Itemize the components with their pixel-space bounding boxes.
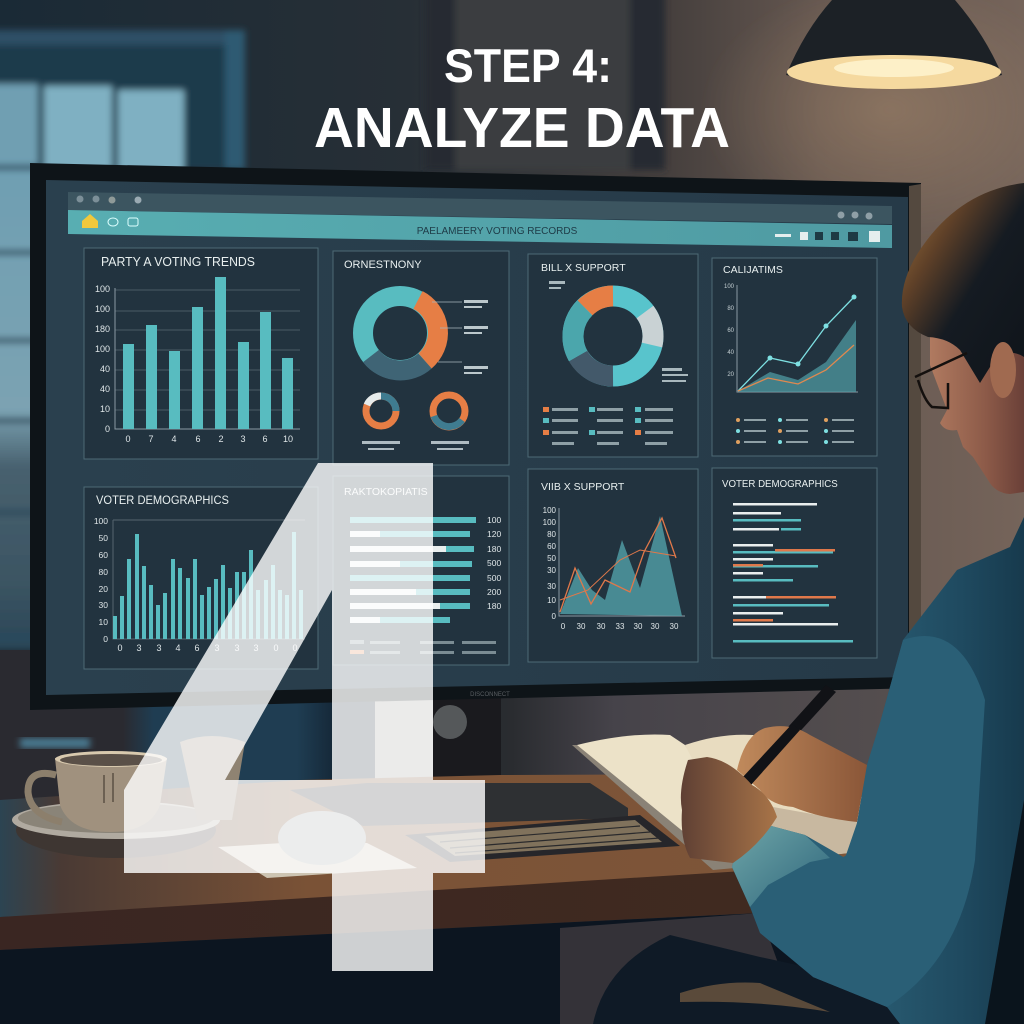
panel: party A voting trends: 0 [105,424,110,434]
panel: horizontal bars: 500 [487,573,501,583]
panel: party A voting trends: 3 [240,434,246,444]
panel: party A voting trends: 40 [100,384,110,394]
glasses [915,353,967,408]
panel: party A voting trends: 10 [283,434,293,444]
panel: party A voting trends: 6 [262,434,268,444]
panel: bill X support donut [528,254,698,457]
monitor base [290,783,628,826]
panel: voter demographics histogram: 3 [253,643,259,653]
title: STEP 4: [444,39,612,92]
panel: donut overview [333,251,509,465]
panel: bill X support line chart: 33 [616,622,625,631]
panel: bill X support line chart: 10 [547,596,557,605]
panel: voter demographics histogram: 80 [99,567,108,577]
panel: voter demographics histogram: 30 [99,600,108,610]
panel: voter demographics histogram: 4 [175,643,181,653]
panel: bill X support line chart: 50 [547,554,557,563]
pen over hand [742,724,800,786]
title [314,39,730,160]
computer mouse [278,811,366,865]
panel: voter demographics histogram: 3 [136,643,142,653]
panel: party A voting trends: 100 [95,344,110,354]
panel: party A voting trends: 4 [171,434,177,444]
panel: horizontal bars: 100 [487,515,501,525]
panel: party A voting trends: 40 [100,364,110,374]
monitor stand [375,695,501,795]
desk [0,773,1024,1024]
panel: calculations line chart: CALIJATIMS [723,264,783,276]
wall below monitor [0,650,1024,820]
blurred background strip [20,738,90,748]
panel: bill X support line chart [528,469,698,662]
panel: bill X support line chart: 30 [547,566,557,575]
cuff [732,823,830,907]
panel: voter demographics histogram: 0 [292,643,298,653]
panel: calculations line chart: 20 [727,372,735,378]
hair [902,183,1024,383]
panel: voter demographics histogram: 3 [234,643,240,653]
panel: voter demographics histogram: 100 [94,516,108,526]
panel: bill X support line chart: 30 [634,622,643,631]
panel: horizontal bars [333,476,509,665]
panel: voter demographics histogram: 3 [214,643,220,653]
torso [813,517,1024,1024]
panel: voter demographics histogram: 50 [99,533,108,543]
panel: bill X support line chart: 100 [543,506,557,515]
panel: party A voting trends: 0 [125,434,131,444]
panel: voter demographics histogram: 6 [194,643,200,653]
sleeve [732,636,985,1007]
paper cup [180,736,245,820]
note pad [218,843,417,878]
panel: party A voting trends [84,248,318,459]
panel: voter demographics histogram: 60 [99,550,108,560]
panel: calculations line chart: 80 [727,306,735,312]
panel: voter demographics histogram: 10 [99,617,108,627]
panel: horizontal bars: 200 [487,587,501,597]
panel: bill X support line chart: 60 [547,542,557,551]
panel: bill X support line chart: 30 [670,622,679,631]
panel: calculations line chart: 60 [727,328,735,334]
panel: donut overview: ORNESTNONY [344,259,422,271]
wall panels [425,0,1024,240]
ear [990,342,1016,398]
panel: horizontal bars: 500 [487,558,501,568]
panel: voter demographics histogram: VOTER DEMOGRAPHICS [96,495,229,507]
panel: voter demographics list: VOTER DEMOGRAPHICS [722,479,838,490]
screen header bar: PAELAMEERY VOTING RECORDS [417,226,578,237]
panel: bill X support line chart: 30 [577,622,586,631]
panel: bill X support line chart: 0 [561,622,566,631]
panel: party A voting trends: PARTY A VOTING TRENDS [101,255,255,269]
panel: voter demographics histogram: 0 [273,643,279,653]
panel: bill X support line chart: 0 [552,612,557,621]
monitor: DISCONNECT [470,692,510,698]
screen header bar [68,210,892,248]
chair back [985,800,1024,1024]
panel: horizontal bars: 120 [487,529,501,539]
face [930,335,1024,494]
panel: horizontal bars: RAKTOKOPIATIS [344,486,428,498]
panel: bill X support line chart: 30 [547,582,557,591]
panel: bill X support line chart: 30 [597,622,606,631]
keyboard [405,815,680,862]
panel: horizontal bars: 180 [487,544,501,554]
title: ANALYZE DATA [314,96,730,160]
big number 4 [124,463,485,971]
panel: party A voting trends: 10 [100,404,110,414]
person [593,183,1024,1024]
panel: voter demographics histogram: 0 [103,634,108,644]
panel: party A voting trends: 7 [148,434,154,444]
panel: party A voting trends: 6 [195,434,201,444]
panel: bill X support line chart: 80 [547,530,557,539]
panel: bill X support line chart: 100 [543,518,557,527]
monitor [30,163,921,710]
panel: party A voting trends: 100 [95,304,110,314]
coffee cup and saucer [12,751,220,858]
fist [681,757,777,863]
panel: calculations line chart [712,258,877,456]
panel: voter demographics histogram: 3 [156,643,162,653]
panel: bill X support line chart: 30 [651,622,660,631]
panel: voter demographics list [712,468,877,658]
legs shadow [593,935,920,1024]
panel: calculations line chart: 40 [727,350,735,356]
ceiling lamp [786,0,1002,89]
panel: calculations line chart: 100 [724,284,735,290]
window [0,30,245,650]
notebook [572,734,867,870]
pen [742,685,836,786]
panel: party A voting trends: 100 [95,284,110,294]
panel: voter demographics histogram: 20 [99,584,108,594]
panel: bill X support donut: BILL X SUPPORT [541,262,626,274]
chair cushion [680,982,830,1012]
panel: party A voting trends: 2 [218,434,224,444]
panel: horizontal bars: 180 [487,601,501,611]
right hand [737,726,867,822]
panel: party A voting trends: 180 [95,324,110,334]
panel: voter demographics histogram: 0 [117,643,123,653]
panel: bill X support line chart: VIIB X SUPPORT [541,481,625,493]
panel: voter demographics histogram [84,487,318,669]
